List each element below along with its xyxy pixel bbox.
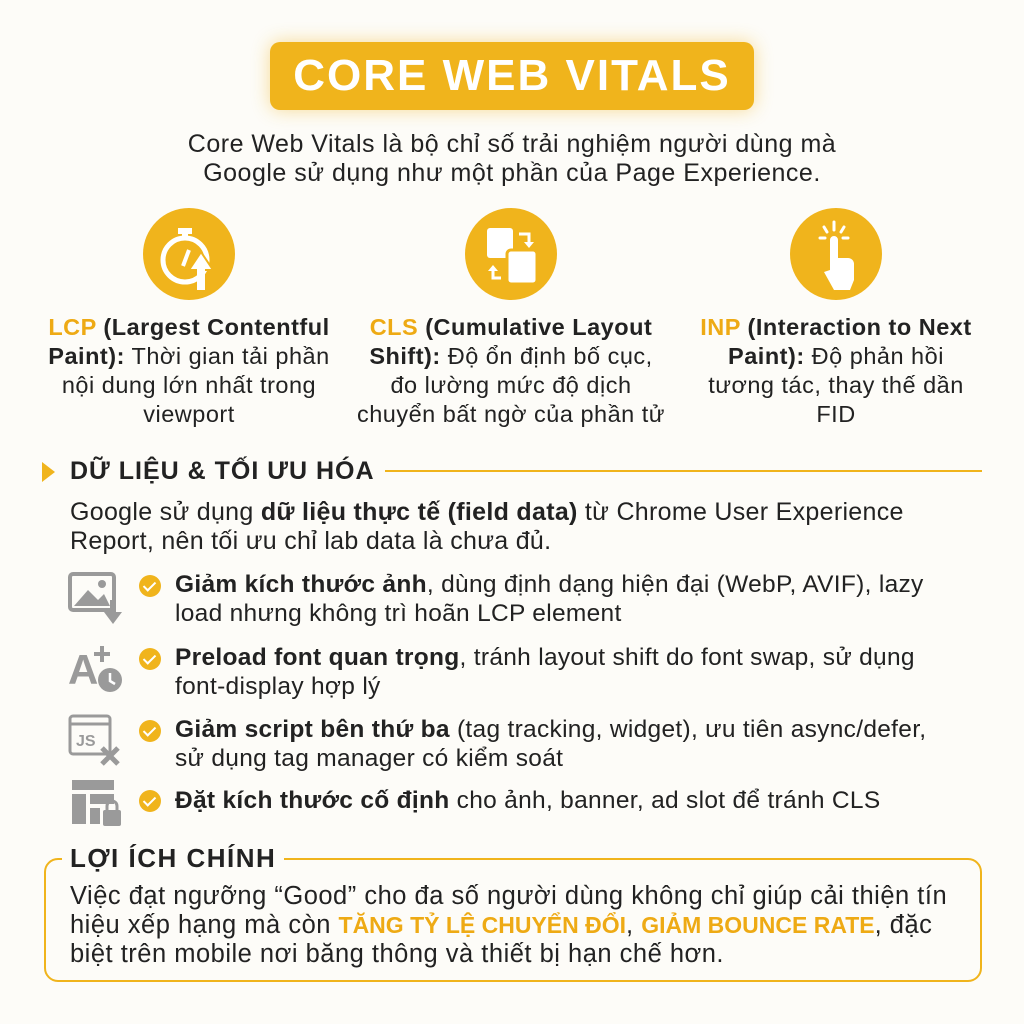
paragraph: field data: Report, nên tối ưu chỉ lab data là chưa đủ. (70, 527, 551, 555)
text: CLS: CLS (Cumulative Layout (370, 314, 652, 340)
paragraph: field data: Google sử dụng dữ liệu thực tế (field data) từ Chrome User Experience (70, 498, 904, 526)
text: INP (700, 314, 972, 427)
icon: script (68, 714, 120, 766)
icon: font: A (68, 646, 98, 693)
icon: LCP stopwatch (143, 208, 235, 300)
text: CLS: chuyển bất ngờ của phần tử (357, 401, 665, 427)
list: Giảm kích thước ảnh, dùng định dạng hiện đại (WebP, AVIF), lazy (175, 571, 924, 598)
text: INP: INP (Interaction to Next (700, 314, 972, 340)
text: benefits: hiệu xếp hạng mà còn TĂNG TỶ LỆ CHUYỂN ĐỔI, GIẢM BOUNCE RATE, đặc (70, 911, 932, 939)
icon: font (68, 646, 122, 693)
text: CLS: đo lường mức độ dịch (390, 372, 632, 398)
list: Giảm script bên thứ ba (tag tracking, widget), ưu tiên async/defer, (175, 716, 926, 743)
text: LCP: Paint): Thời gian tải phần (48, 343, 330, 369)
list: Đặt kích thước cố định cho ảnh, banner, ad slot để tránh CLS (175, 787, 880, 814)
text: LCP: nội dung lớn nhất trong (62, 372, 316, 398)
subtitle: Google sử dụng như một phần của Page Experience. (203, 159, 821, 187)
text: INP: Paint): Độ phản hồi (728, 343, 944, 369)
item 1 (139, 575, 161, 597)
title (270, 42, 754, 110)
item 3 (139, 720, 161, 742)
text: CLS: Shift): Độ ổn định bố cục, (369, 343, 653, 369)
text: benefits: Việc đạt ngưỡng “Good” cho đa số người dùng không chỉ giúp cải thiện tín (70, 882, 947, 910)
list: sử dụng tag manager có kiểm soát (175, 745, 563, 772)
icon: INP tap (790, 208, 882, 300)
text: INP: FID (816, 401, 856, 427)
paragraph: field data (70, 498, 904, 555)
heading: data & optimization (42, 456, 982, 485)
text: benefits: biệt trên mobile nơi băng thông và thiết bị hạn chế hơn. (70, 940, 724, 968)
icon: CLS layout shift (465, 208, 557, 300)
title: CORE WEB VITALS (293, 51, 731, 100)
item 4 (139, 790, 161, 812)
text: LCP (48, 314, 330, 427)
subtitle: Core Web Vitals là bộ chỉ số trải nghiệm người dùng mà (188, 130, 836, 158)
list: load nhưng không trì hoãn LCP element (175, 600, 622, 627)
heading: benefits: LỢI ÍCH CHÍNH (70, 843, 276, 873)
text: INP: tương tác, thay thế dần (708, 372, 964, 398)
panel: key benefits (44, 858, 982, 982)
text: LCP: LCP (Largest Contentful (48, 314, 330, 340)
text: LCP: viewport (143, 401, 235, 427)
subtitle (188, 130, 836, 187)
item 2 (139, 648, 161, 670)
text: CLS (357, 314, 665, 427)
list (68, 571, 926, 826)
heading: data & optimization: DỮ LIỆU & TỐI ƯU HÓA (70, 457, 375, 485)
list: font-display hợp lý (175, 673, 381, 700)
icon: image (68, 572, 122, 624)
list: Preload font quan trọng, tránh layout shift do font swap, sử dụng (175, 644, 915, 671)
icon: script: JS (76, 733, 96, 750)
icon: layout lock (72, 780, 121, 826)
text: benefits (70, 882, 947, 968)
